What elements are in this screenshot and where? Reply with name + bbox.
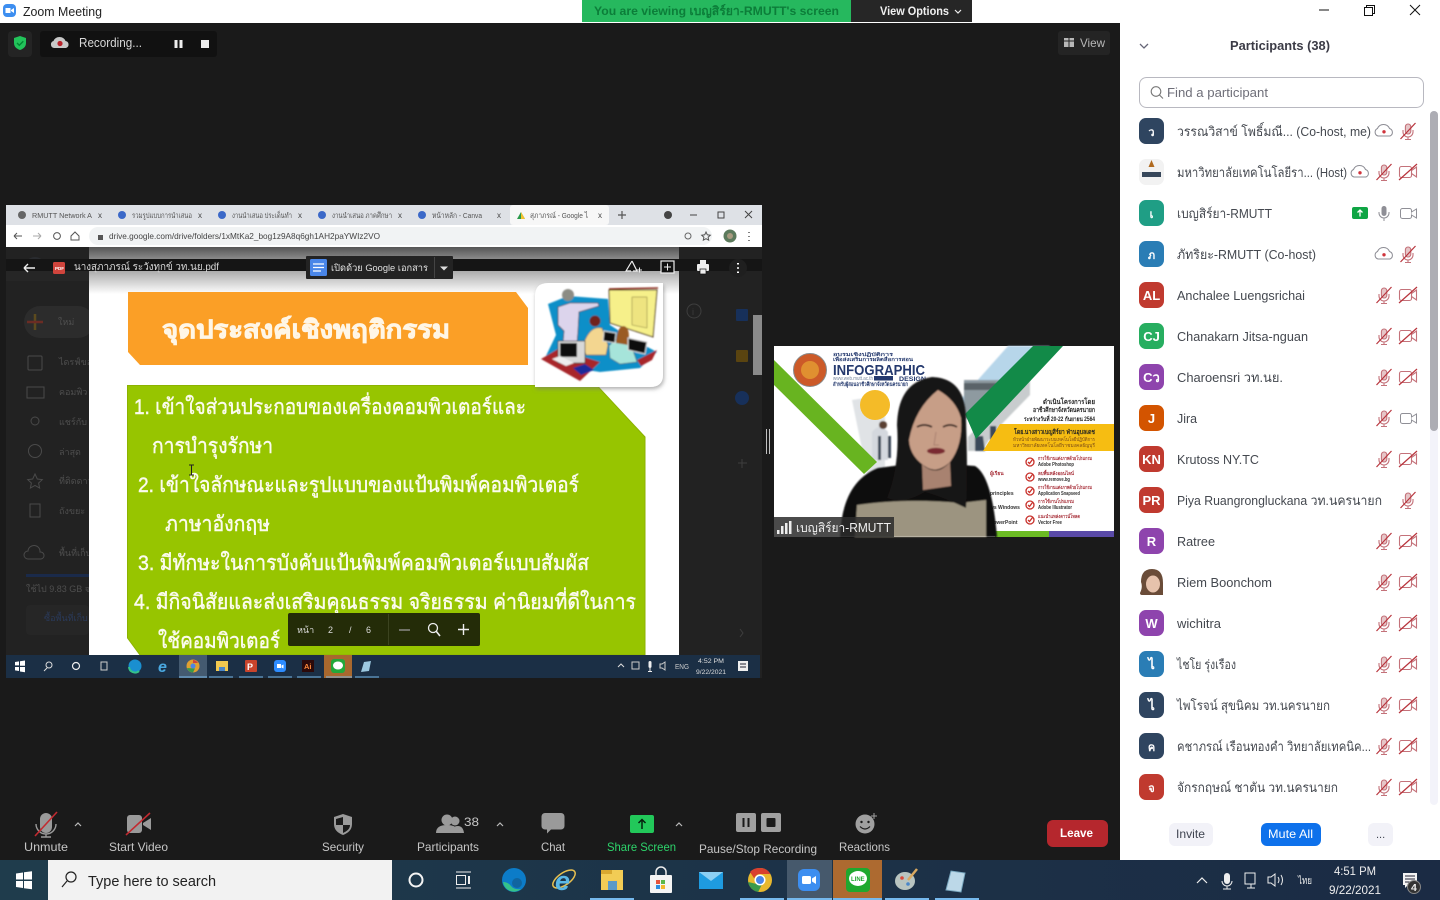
mini windows taskbar <box>6 655 760 678</box>
participant row: Anchalee <box>1139 282 1417 308</box>
participant row: วรรณวิสาข์ <box>1139 118 1416 144</box>
participant row: Ratree: Ratree <box>1177 534 1215 549</box>
virtual background poster: อาชีวศึกษาจังหวัดนครนายก <box>1033 406 1095 414</box>
dimmed drive sidebar: ใช้ไป 9.83 GB จ <box>26 584 90 594</box>
dimmed drive sidebar: ใหม่ <box>58 317 74 327</box>
start button <box>16 871 32 889</box>
virtual background poster: เพื่อส่งเสริมการผลิตสื่อการสอน <box>833 356 914 362</box>
virtual background poster: www.web.mutt.ac.th <box>833 376 873 382</box>
participant row: Anchalee: AL <box>1143 288 1160 303</box>
browser tab strip: x <box>497 211 501 220</box>
dimmed drive sidebar: ซื้อพื้นที่เก็บ <box>44 611 88 623</box>
shared screen: browser window <box>6 205 762 678</box>
participant row: Krutoss <box>1139 446 1417 472</box>
participant row: Jira: J <box>1148 411 1155 426</box>
virtual background poster: ws Windows <box>989 505 1020 511</box>
pdf page controls: 6 <box>366 625 371 635</box>
virtual background poster: ผู้เรียน <box>990 470 1004 478</box>
security shield badge <box>8 31 32 57</box>
edge icon <box>502 868 526 892</box>
clip art: computer class <box>535 283 663 387</box>
mini windows taskbar: P <box>247 662 253 672</box>
participant row: Chanakarn <box>1139 323 1417 349</box>
virtual background poster: ระหว่างวันที่ 20-22 กันยายน 2564 <box>1024 414 1096 423</box>
open with google docs button <box>306 256 453 279</box>
text cursor <box>189 465 194 475</box>
participant row: Piya: Piya Ruangrongluckana วท.นครนายก <box>1177 493 1382 508</box>
dimmed drive sidebar: ถังขยะ <box>59 506 85 516</box>
virtual background poster: หัวหน้าฝ่ายพัฒนาระบบเทคโนโลยีปฏิบัติการ <box>1013 436 1095 443</box>
virtual background poster: Adobe Illustrator <box>1038 505 1072 511</box>
notepad icon <box>946 871 965 892</box>
mini windows taskbar: Ai <box>304 662 312 671</box>
more options button <box>1368 823 1393 846</box>
mini windows taskbar: 9/22/2021 <box>696 669 726 676</box>
virtual background poster: ลบพื้นหลังออนไลน์ <box>1038 468 1075 477</box>
virtual background poster: principles <box>990 491 1014 497</box>
zoom icon <box>787 860 832 900</box>
presenter <box>840 377 997 537</box>
presenter video tile <box>774 346 1114 537</box>
taskbar search box <box>48 860 392 900</box>
virtual background poster: Application Snapseed <box>1038 491 1080 497</box>
browser tab strip <box>6 205 762 225</box>
virtual background poster: สำหรับผู้สอนอาชีวศึกษาจังหวัดนครนายก <box>833 380 909 389</box>
notification badge <box>1403 873 1420 894</box>
pdf page controls <box>288 613 480 646</box>
participant row: Charoensri: Charoensri วท.นย. <box>1177 370 1283 385</box>
paint icon <box>895 869 917 890</box>
participant row: จักรกฤษณ์ <box>1139 774 1417 800</box>
virtual background poster: อบรมเชิงปฏิบัติการ <box>833 351 894 358</box>
chat control: Chat <box>541 840 566 854</box>
meeting background <box>0 0 1120 860</box>
participant row: วรรณวิสาข์: วรรณวิสาข์ โพธิ์มณี... (Co-host, me) <box>1177 122 1371 139</box>
screen share banner: View Options <box>880 6 949 18</box>
presenter name tag <box>774 517 894 537</box>
green objectives panel: การบำรุงรักษา <box>152 435 273 459</box>
browser tab strip: RMUTT Network A <box>32 211 92 220</box>
virtual background poster: www.remove.bg <box>1037 477 1070 483</box>
participant row: ไชโย <box>1139 651 1417 677</box>
browser tab strip: รวมรูปแบบการนำเสนอ <box>132 211 192 220</box>
dimmed drive right rail: i <box>692 307 694 317</box>
pause and stop recording control <box>699 813 817 856</box>
browser address bar <box>6 225 762 247</box>
virtual background poster: มหาวิทยาลัยเทคโนโลยีราชมงคลธัญบุรี <box>1013 442 1095 449</box>
green objectives panel: ใช้คอมพิวเตอร์ <box>158 629 280 653</box>
participant row: ไชโย: ไชโย รุ่งเรือง <box>1176 657 1236 673</box>
taskbar search box: Type here to search <box>88 873 216 890</box>
participant row: Piya <box>1139 487 1416 513</box>
splitter handle <box>766 429 770 454</box>
participant row: ไชโย: ไ <box>1146 656 1155 672</box>
participant search box <box>1140 78 1424 108</box>
participant row: wichitra <box>1139 610 1417 636</box>
meeting toolbar <box>0 800 1120 860</box>
participant row: เบญสิร์ยา presenter: เบญสิร์ยา-RMUTT <box>1177 206 1272 221</box>
security control: Security <box>322 840 364 854</box>
green objectives panel: 2. เข้าใจลักษณะและรูปแบบของแป้นพิมพ์คอมพิวเตอร์ <box>138 473 579 498</box>
mute all button: Mute All <box>1268 827 1313 841</box>
participant row: Krutoss: KN <box>1142 452 1161 467</box>
participant row: ไพโรจน์ <box>1139 692 1417 718</box>
file explorer icon <box>601 870 623 890</box>
virtual background poster: แนะนำแหล่งดาวน์โหลด <box>1038 513 1080 520</box>
participant search box: Find a participant <box>1167 85 1268 100</box>
participant row: ไพโรจน์: ไพโรจน์ สุขนิคม วท.นครนายก <box>1176 698 1330 714</box>
title bar <box>0 0 1440 23</box>
mail icon <box>699 872 723 889</box>
cortana and task view <box>410 872 471 888</box>
virtual background poster: DESIGN <box>899 377 926 383</box>
virtual background poster: PowerPoint <box>990 520 1018 526</box>
participant row: คชาภรณ์: ค <box>1148 742 1155 754</box>
participant row: คชาภรณ์ <box>1139 733 1417 759</box>
virtual background poster: โดย.นางสาวเบญสิร์ยา ฟ่านอุบลเดช <box>1013 427 1095 436</box>
dimmed drive sidebar: ที่ติดดาว <box>59 474 93 486</box>
reactions control: Reactions <box>839 840 890 854</box>
participants control: Participants <box>417 840 479 854</box>
participant row: Riem Boonchom <box>1139 569 1417 595</box>
virtual background poster: Adobe Photoshop <box>1038 462 1074 468</box>
participant row: วรรณวิสาข์: ว <box>1148 127 1155 139</box>
participant row: Charoensri <box>1139 364 1417 390</box>
participant row: ภัทริยะ: ภัทริยะ-RMUTT (Co-host) <box>1177 247 1316 262</box>
start video control <box>109 813 168 854</box>
panel header: Participants (38) <box>1230 39 1330 53</box>
virtual background poster: การใช้งานโปรแกรม <box>1038 498 1074 505</box>
browser tab strip: x <box>598 211 602 220</box>
participant row: มหาวิทยาลัย host <box>1139 159 1417 185</box>
notification badge: 4 <box>1411 882 1417 894</box>
participant row: Riem Boonchom: Riem Boonchom <box>1177 575 1272 590</box>
participant row: Piya: PR <box>1142 493 1161 508</box>
line icon: LINE <box>851 877 865 883</box>
dimmed drive sidebar: พื้นที่เก็บ <box>59 546 92 558</box>
mini windows taskbar: e <box>158 659 167 676</box>
participant row: ภัทริยะ: ภ <box>1148 250 1155 262</box>
start video control: Start Video <box>109 840 168 854</box>
participant row: Chanakarn: CJ <box>1143 329 1160 344</box>
participant row: Ratree: R <box>1147 534 1157 549</box>
system tray: ไทย <box>1297 875 1312 887</box>
virtual background poster <box>774 346 1114 537</box>
green objectives panel: 3. มีทักษะในการบังคับแป้นพิมพ์คอมพิวเตอร์แบบสัมผัส <box>138 551 589 575</box>
participant row: คชาภรณ์: คชาภรณ์ เรือนทองคำ วิทยาลัยเทคนิค... <box>1177 739 1371 754</box>
slide title banner: จุดประสงค์เชิงพฤติกรรม <box>162 315 450 346</box>
participant row: เบญสิร์ยา presenter: เ <box>1150 209 1154 221</box>
slide title banner <box>128 292 528 365</box>
windows taskbar <box>0 860 1440 900</box>
screen share banner: You are viewing เบญสิร์ยา-RMUTT's screen <box>594 4 839 18</box>
participant row: Jira: Jira <box>1177 411 1198 426</box>
participants control <box>417 814 503 854</box>
recording indicator: Recording... <box>79 35 142 50</box>
open with google docs button: เปิดด้วย Google เอกสาร <box>331 263 428 274</box>
participant row: Krutoss: Krutoss NY.TC <box>1177 452 1259 467</box>
browser tab strip: x <box>398 211 402 220</box>
participant row: Charoensri: Cว <box>1143 370 1160 385</box>
mute all button <box>1261 823 1321 846</box>
participant row: Anchalee: Anchalee Luengsrichai <box>1177 288 1305 303</box>
drive viewer top bar: นางสุภาภรณ์ ระวังทุกข์ วท.นย.pdf <box>74 261 219 273</box>
participants panel <box>1120 23 1440 860</box>
chrome icon <box>748 868 772 892</box>
participant list scrollbar <box>1430 111 1438 805</box>
system tray <box>1197 873 1312 889</box>
recording indicator <box>40 31 217 57</box>
window controls <box>1319 5 1420 16</box>
pdf page controls: / <box>349 625 352 635</box>
chat control <box>541 813 566 854</box>
browser tab strip: สุภาภรณ์ - Google ไ <box>530 211 588 220</box>
unmute control <box>24 812 81 854</box>
pdf slide page <box>89 247 679 655</box>
participant row: wichitra: wichitra <box>1176 616 1222 631</box>
virtual background poster: การใช้งานแต่งภาพด้วยโปรแกรม <box>1038 484 1092 491</box>
more options button: ... <box>1376 829 1385 841</box>
title bar: Zoom Meeting <box>23 5 102 19</box>
presenter name tag: เบญสิร์ยา-RMUTT <box>796 521 891 535</box>
participant row: จักรกฤษณ์: จ <box>1148 783 1155 795</box>
virtual background poster: การใช้งานแต่งภาพด้วยโปรแกรม <box>1038 455 1092 462</box>
participant row: ไพโรจน์: ไ <box>1146 697 1155 713</box>
line icon <box>833 860 882 900</box>
green objectives panel: 4. มีกิจนิสัยและส่งเสริมคุณธรรม จริยธรรม ค่านิยมที่ดีในการ <box>134 587 636 615</box>
internet explorer icon <box>550 866 578 896</box>
browser tab strip: หน้าหลัก - Canva <box>432 211 483 220</box>
dimmed drive right rail <box>679 247 762 655</box>
panel header <box>1140 39 1330 53</box>
taskbar running indicators <box>590 898 979 900</box>
screen share banner <box>582 0 972 22</box>
dimmed drive sidebar: ล่าสุด <box>59 447 81 458</box>
view button: View <box>1080 36 1105 50</box>
browser tab strip: งานนำเสนอ ภาคศึกษา <box>332 211 392 220</box>
participant row: มหาวิทยาลัย host: มหาวิทยาลัยเทคโนโลยีรา... (Host) <box>1177 165 1347 180</box>
share screen control <box>607 815 682 854</box>
dimmed drive sidebar: คอมพิว <box>59 387 87 397</box>
pdf page controls: 2 <box>328 625 333 635</box>
browser tab strip: งานนำเสนอ ประเด็นทำ <box>232 210 292 220</box>
share screen control: Share Screen <box>607 840 676 854</box>
view button <box>1058 31 1110 55</box>
green objectives panel: ภาษาอังกฤษ <box>165 513 270 536</box>
invite button <box>1169 823 1213 846</box>
reactions control <box>839 813 890 854</box>
leave button: Leave <box>1060 826 1093 840</box>
participants control: 38 <box>464 815 479 829</box>
invite button: Invite <box>1176 827 1205 841</box>
taskbar clock: 9/22/2021 <box>1329 883 1381 897</box>
mini windows taskbar: 4:52 PM <box>698 658 724 665</box>
green objectives panel: 1. เข้าใจส่วนประกอบของเครื่องคอมพิวเตอร์และ <box>134 392 526 419</box>
pause and stop recording control: Pause/Stop Recording <box>699 842 817 856</box>
participant row: ภัทริยะ <box>1139 241 1416 267</box>
taskbar clock <box>1329 864 1381 897</box>
browser tab strip: x <box>198 211 202 220</box>
participant row: Chanakarn: Chanakarn Jitsa-nguan <box>1177 329 1308 344</box>
unmute control: Unmute <box>24 840 68 854</box>
leave button <box>1047 820 1108 847</box>
browser tab strip: x <box>98 211 102 220</box>
taskbar clock: 4:51 PM <box>1334 864 1376 878</box>
participant row: เบญสิร์ยา presenter <box>1139 200 1416 226</box>
browser tab strip: x <box>298 211 302 220</box>
drive viewer top bar: PDF <box>55 266 64 271</box>
mini windows taskbar: ENG <box>675 664 689 671</box>
participant row: จักรกฤษณ์: จักรกฤษณ์ ชาตัน วท.นครนายก <box>1177 780 1338 795</box>
virtual background poster: INFOGRAPHIC <box>833 362 925 379</box>
store icon <box>650 867 672 893</box>
dimmed drive sidebar: ไดรฟ์ขอ <box>58 356 92 367</box>
participant row: Ratree <box>1139 528 1417 554</box>
pdf page controls: หน้า <box>297 625 314 635</box>
participant row: wichitra: W <box>1145 616 1158 631</box>
internet explorer icon: e <box>555 866 570 896</box>
dimmed drive sidebar <box>6 247 94 655</box>
virtual background poster: ดำเนินโครงการโดย <box>1043 397 1095 406</box>
drive viewer top bar <box>6 259 762 281</box>
green objectives panel <box>128 386 645 655</box>
browser address bar: drive.google.com/drive/folders/1xMtKa2_bog1z9A8q6gh1AH2paYWIz2VO <box>109 231 380 241</box>
security control <box>322 814 364 854</box>
virtual background poster: Vector Free <box>1038 520 1062 526</box>
dimmed drive sidebar: แชร์กับ <box>59 416 87 427</box>
participant row: Jira <box>1139 405 1416 431</box>
